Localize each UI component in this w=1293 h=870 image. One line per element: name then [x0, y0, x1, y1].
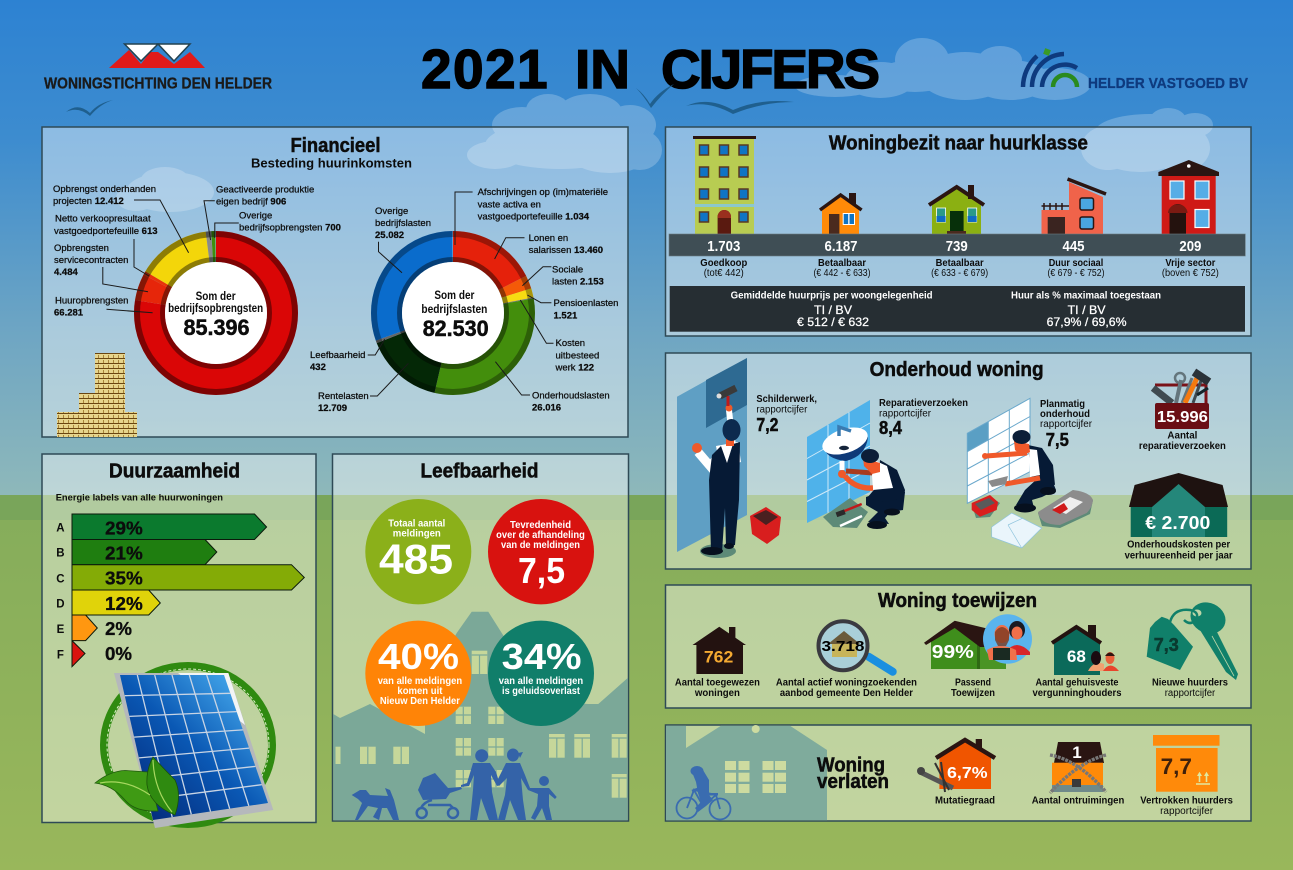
icon: house 762: 762 — [704, 648, 733, 666]
label: rentelasten: Rentelasten — [318, 391, 369, 402]
icon: toolbox: 15.996 — [1157, 409, 1208, 426]
bar chart: energy labels: B — [56, 548, 65, 560]
bar chart: energy labels: A — [56, 523, 65, 535]
bar chart: energy labels: 0% — [105, 644, 132, 664]
label: nieuwe huurders — [1152, 678, 1228, 699]
label: geactiveerde produktie: 906 — [270, 196, 286, 208]
label: nieuwe huurders: Nieuwe huurders — [1152, 678, 1228, 688]
panel: Woningbezit naar huurklasse — [666, 127, 1251, 336]
badge: 34%: van alle meldingen — [499, 675, 583, 687]
text: reparatieverzoeken: 8,4 — [879, 418, 902, 438]
icon: key with tag: 7,3 — [1154, 635, 1179, 655]
badge: totaal aantal meldingen: 485 — [379, 536, 453, 582]
label: netto verkoopresultaat: Netto verkoopresultaat — [55, 214, 151, 224]
badge: 34%: 34% — [502, 636, 582, 677]
label: vergunninghouders: vergunninghouders — [1032, 688, 1122, 699]
heading: Financieel: Financieel — [290, 135, 380, 157]
label: onderhoudslasten: 26.016 — [532, 402, 561, 414]
donut chart: bedrijfslasten — [374, 234, 532, 392]
label: leefbaarheid: Leefbaarheid — [310, 350, 365, 361]
label: geactiveerde produktie: Geactiveerde produktie — [216, 184, 314, 196]
rent classes — [700, 258, 1219, 279]
rent classes: Vrije sector — [1165, 258, 1215, 269]
label: vergunninghouders — [1032, 678, 1122, 699]
bar chart: energy labels — [56, 514, 304, 667]
donut centre: opbrengsten: 85.396 — [184, 315, 250, 340]
icon: chained house: 1 — [1072, 743, 1082, 762]
icon: house with couple: 99% — [932, 642, 974, 662]
icon: magnifier with house — [818, 621, 893, 672]
label: rentelasten: 12.709 — [318, 403, 347, 414]
label: ontruimingen: Aantal ontruimingen — [1032, 796, 1124, 806]
label: vertrokken huurders — [1140, 796, 1233, 817]
bar chart: energy labels: C — [56, 573, 65, 585]
illustration: family with dog and stroller — [352, 748, 557, 820]
badge: tevredenheid: over de afhandeling — [496, 529, 585, 541]
band: average rent: Gemiddelde huurprijs per woongelegenheid — [731, 290, 933, 302]
donut centre: lasten — [421, 288, 489, 341]
label: woningzoekenden — [776, 678, 917, 699]
donut centre: lasten: bedrijfslasten — [421, 304, 487, 316]
label: toegewezen woningen: Aantal toegewezen — [675, 678, 760, 688]
rent classes: Betaalbaar — [936, 258, 984, 269]
label: sociale lasten: lasten — [552, 276, 580, 288]
donut centre: lasten: Som der — [434, 288, 475, 302]
label: onderhanden projecten: projecten — [53, 196, 95, 207]
label: woningzoekenden: aanbod gemeente Den Helder — [780, 688, 913, 699]
icon: house with maintenance costs — [1129, 473, 1228, 537]
icon: house 68 with people: 68 — [1067, 647, 1086, 666]
text: schilderwerk — [756, 393, 817, 435]
illustration: house silhouette with cyclist — [666, 725, 827, 820]
illustration: painter — [677, 358, 747, 558]
heading: Woning toewijzen: Woning toewijzen — [878, 590, 1037, 612]
illustration: plumber — [807, 400, 905, 529]
band: number of homes: 6.187 — [824, 238, 858, 255]
label: onderhoudskosten: verhuureenheid per jaar — [1125, 550, 1233, 562]
panel: Duurzaamheid — [42, 454, 316, 828]
label: lonen en salarissen: Lonen en — [529, 233, 568, 244]
rent classes: (€ 679 - € 752) — [1048, 268, 1104, 279]
logo: Helder Vastgoed BV: HELDER VASTGOED BV — [1088, 76, 1248, 92]
text: reparatieverzoeken: rapportcijfer — [879, 408, 932, 420]
bar chart: energy labels: 12% — [105, 594, 143, 614]
icon: apartment building — [693, 136, 756, 234]
icon: house with couple — [924, 614, 1032, 669]
rent classes: Betaalbaar — [818, 258, 866, 269]
heading: Onderhoud woning: Onderhoud woning — [870, 359, 1044, 381]
subheading: Besteding huurinkomsten — [251, 156, 412, 170]
badge: 40% — [365, 621, 471, 726]
band: average rent: Huur als % maximaal toegestaan — [1011, 290, 1161, 302]
bar chart: energy labels: F — [57, 649, 64, 661]
rent classes: Goedkoop — [700, 258, 747, 269]
badge: tevredenheid: Tevredenheid — [510, 519, 571, 531]
label: pensioenlasten: Pensioenlasten — [554, 298, 618, 309]
donut centre: opbrengsten: Som der — [196, 289, 236, 303]
label: afschrijvingen: 1.034 — [565, 212, 590, 222]
donut centre: opbrengsten — [168, 289, 263, 340]
heading: Woning verlaten — [817, 754, 889, 793]
label: toegewezen woningen: woningen — [694, 688, 740, 699]
birds — [66, 84, 794, 116]
icon: house mutatiegraad with tools: 6,7% — [947, 765, 988, 782]
heading: Woning verlaten: verlaten — [817, 771, 889, 793]
badge: 40%: 40% — [378, 636, 459, 677]
label: overige bedrijfslasten: Overige — [375, 206, 408, 217]
donut centre: lasten: 82.530 — [423, 316, 489, 341]
donut centre: opbrengsten: bedrijfsopbrengsten — [168, 303, 263, 315]
text: planmatig onderhoud: rapportcijfer — [1040, 419, 1093, 430]
label: nieuwe huurders: rapportcijfer — [1165, 688, 1216, 699]
band: average rent: 67,9% / 69,6% — [1047, 315, 1127, 329]
label: netto verkoopresultaat: 613 — [142, 226, 158, 237]
band: number of homes — [669, 234, 1245, 256]
label: onderhanden projecten: Opbrengst onderhanden — [53, 184, 156, 195]
panel: Leefbaarheid — [332, 454, 628, 821]
label: kosten uitbesteed werk: uitbesteed — [556, 350, 599, 362]
band: number of homes: 209 — [1179, 238, 1201, 255]
label: servicecontracten: Opbrengsten — [54, 243, 109, 254]
label: lonen en salarissen: 13.460 — [574, 245, 603, 256]
label: servicecontracten: 4.484 — [54, 267, 78, 278]
panel: Woning verlaten — [666, 725, 1251, 821]
badge: tevredenheid: 7,5 — [518, 550, 565, 591]
band: average rent: € 512 / € 632 — [797, 315, 869, 329]
label: aantal reparatieverzoeken — [1139, 430, 1226, 452]
icon: key with tag — [1147, 597, 1238, 680]
heading: Duurzaamheid: Duurzaamheid — [109, 460, 240, 482]
rent classes: (€ 633 - € 679) — [931, 268, 988, 279]
text: reparatieverzoeken: Reparatieverzoeken — [879, 397, 968, 409]
clouds — [116, 38, 1213, 212]
band: number of homes: 1.703 — [707, 238, 740, 255]
rent classes: (€ 442 - € 633) — [814, 268, 870, 279]
label: overige bedrijfslasten: 25.082 — [375, 230, 404, 241]
label: afschrijvingen: vaste activa en — [478, 200, 541, 210]
subheading: energie labels: Energie labels van alle huurwoningen — [56, 492, 223, 504]
icon: moving box: 7,7 — [1161, 754, 1192, 779]
label: woningzoekenden: Aantal actief woningzoekenden — [776, 678, 917, 688]
band: number of homes: 739 — [946, 238, 968, 255]
label: vergunninghouders: Aantal gehuisveste — [1036, 678, 1119, 688]
badge: 40%: Nieuw Den Helder — [380, 695, 460, 707]
text: planmatig onderhoud — [1040, 398, 1093, 450]
label: aantal reparatieverzoeken: Aantal — [1167, 430, 1198, 442]
badge: totaal aantal meldingen — [365, 499, 471, 604]
title: IN — [575, 38, 645, 100]
label: afschrijvingen: vastgoedportefeuille — [478, 212, 565, 222]
icon: magnifier with house: 3.718 — [822, 638, 864, 655]
icon: house mutatiegraad with tools — [917, 739, 995, 792]
bar chart: energy labels: 29% — [105, 518, 143, 538]
icon: moving box — [1153, 735, 1220, 792]
label: servicecontracten: servicecontracten — [54, 255, 128, 266]
text: schilderwerk: Schilderwerk, — [756, 393, 817, 405]
badge: 40%: van alle meldingen — [378, 675, 462, 687]
band: average rent — [670, 286, 1245, 332]
label: kosten uitbesteed werk: 122 — [578, 362, 594, 374]
text: schilderwerk: 7,2 — [756, 415, 778, 435]
label: onderhoudskosten: Onderhoudskosten per — [1127, 540, 1230, 550]
label: overige opbrengsten: Overige — [239, 210, 272, 222]
bar chart: energy labels: 2% — [105, 619, 132, 639]
label: passend toewijzen: Toewijzen — [951, 688, 995, 699]
label: leefbaarheid: 432 — [310, 362, 326, 373]
title: 2021 — [421, 38, 566, 100]
badge: 40%: komen uit — [397, 685, 443, 697]
label: sociale lasten: 2.153 — [580, 276, 604, 288]
logo: Woningstichting Den Helder: WONINGSTICHTING DEN HELDER — [44, 76, 272, 92]
label: vertrokken huurders: rapportcijfer — [1160, 806, 1214, 817]
bar chart: energy labels: 21% — [105, 544, 143, 564]
icon: coins — [57, 353, 137, 437]
text: planmatig onderhoud: Planmatig — [1040, 398, 1085, 410]
label: pensioenlasten: 1.521 — [554, 310, 578, 322]
band: average rent: TI / BV — [1068, 303, 1106, 317]
text: planmatig onderhoud: onderhoud — [1040, 408, 1090, 420]
badge: tevredenheid — [488, 499, 594, 604]
illustration: tiler — [967, 398, 1093, 548]
leader lines — [103, 192, 554, 396]
label: aantal reparatieverzoeken: reparatieverzoeken — [1139, 441, 1226, 452]
icon: red paint bucket — [750, 507, 781, 544]
label: netto verkoopresultaat: vastgoedportefeuille — [54, 226, 142, 237]
label: onderhanden projecten: 12.412 — [95, 196, 124, 207]
label: huuropbrengsten: 66.281 — [54, 308, 84, 318]
logo: Helder Vastgoed BV — [1023, 48, 1248, 92]
rent classes: (boven € 752) — [1162, 268, 1219, 279]
logo: Woningstichting Den Helder — [44, 44, 272, 92]
illustration: solar panel with leaves — [95, 666, 273, 828]
label: overige opbrengsten: bedrijfsopbrengsten — [239, 222, 325, 234]
label: kosten uitbesteed werk: Kosten — [556, 338, 585, 349]
badge: tevredenheid: van de meldingen — [501, 539, 580, 551]
label: onderhoudslasten: Onderhoudslasten — [532, 390, 610, 402]
label: geactiveerde produktie: eigen bedrijf — [216, 196, 270, 208]
icon: house 762 — [692, 627, 746, 674]
label: afschrijvingen: Afschrijvingen op (im)materiële — [478, 187, 608, 198]
label: passend toewijzen — [951, 678, 995, 699]
donut chart: bedrijfsopbrengsten — [137, 234, 295, 392]
icon: orange house — [820, 193, 862, 234]
icon: house with maintenance costs: € 2.700 — [1145, 513, 1210, 533]
badge: totaal aantal meldingen: Totaal aantal — [388, 518, 445, 530]
text: schilderwerk: rapportcijfer — [756, 404, 808, 416]
bar chart: energy labels: E — [57, 624, 65, 636]
rent classes: Duur sociaal — [1049, 258, 1103, 269]
label: vertrokken huurders: Vertrokken huurders — [1140, 796, 1233, 806]
panel: Financieel — [42, 127, 628, 437]
panel: Woning toewijzen — [666, 585, 1251, 708]
bar chart: energy labels: D — [56, 599, 65, 611]
label: mutatiegraad: Mutatiegraad — [935, 796, 995, 806]
band: average rent: TI / BV — [814, 303, 852, 317]
badge: totaal aantal meldingen: meldingen — [393, 528, 441, 540]
heading: Leefbaarheid: Leefbaarheid — [420, 460, 538, 482]
heading: Woning verlaten: Woning — [817, 754, 885, 776]
label: onderhoudskosten — [1125, 540, 1233, 562]
icon: house 68 with people — [1052, 625, 1119, 675]
icon: green house — [929, 185, 984, 234]
badge: 34%: is geluidsoverlast — [502, 685, 580, 697]
icon: red town house — [1158, 160, 1219, 234]
illustration: town silhouette — [333, 612, 628, 820]
label: overige bedrijfslasten: bedrijfslasten — [375, 218, 431, 229]
rent classes: (tot€ 442) — [704, 268, 744, 279]
label: sociale lasten: Sociale — [552, 264, 583, 276]
label: overige opbrengsten: 700 — [325, 222, 341, 234]
heading: Woningbezit: Woningbezit naar huurklasse — [829, 132, 1088, 154]
icon: chained house — [1050, 742, 1106, 793]
icon: toolbox — [1153, 372, 1209, 429]
bar chart: energy labels: 35% — [105, 568, 143, 588]
label: lonen en salarissen: salarissen — [529, 245, 574, 256]
label: huuropbrengsten: Huuropbrengsten — [55, 296, 128, 306]
text: planmatig onderhoud: 7,5 — [1046, 430, 1069, 450]
label: toegewezen woningen — [675, 678, 760, 699]
icon: red-orange house — [1042, 179, 1106, 234]
title: CIJFERS — [661, 38, 878, 100]
panel: Onderhoud woning — [666, 353, 1251, 569]
badge: 34% — [488, 621, 594, 726]
band: number of homes: 445 — [1062, 238, 1084, 255]
label: passend toewijzen: Passend — [955, 678, 991, 688]
label: kosten uitbesteed werk: werk — [554, 362, 578, 374]
text: reparatieverzoeken — [879, 397, 968, 438]
